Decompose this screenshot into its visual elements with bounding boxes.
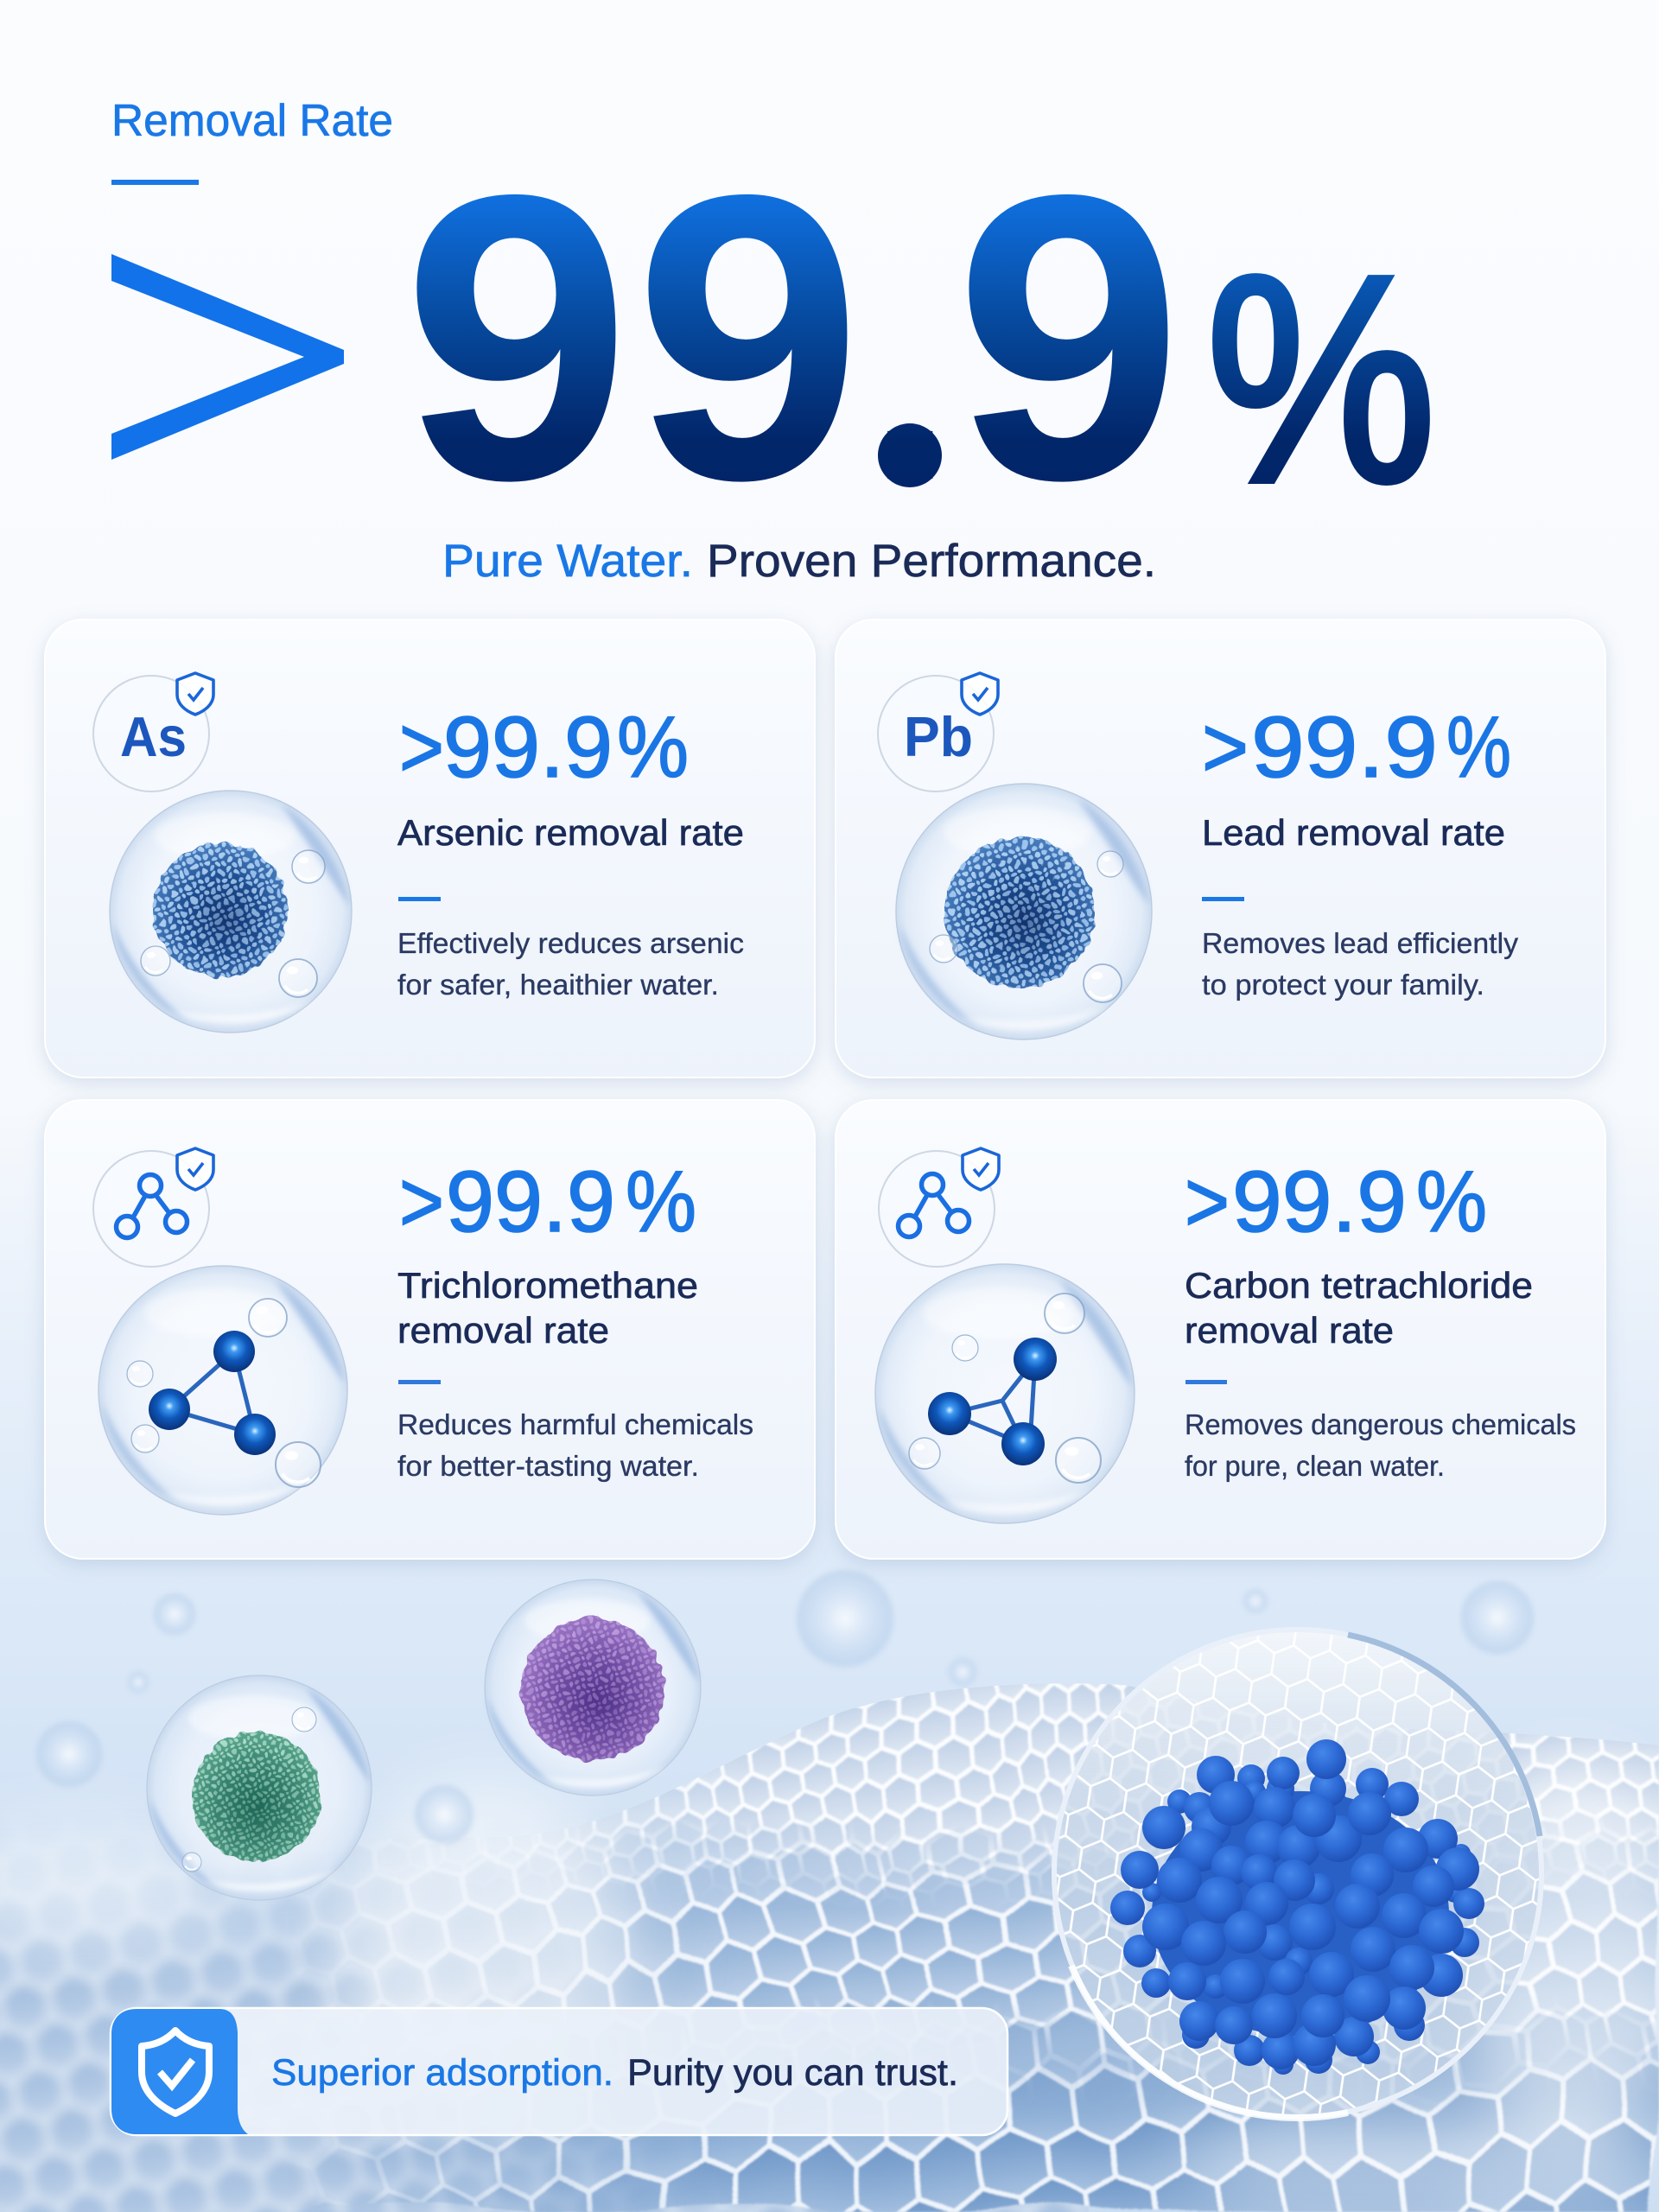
card background <box>836 620 1605 1077</box>
molecule badge <box>93 1148 213 1267</box>
stat label: Arsenic removal rate <box>397 812 744 853</box>
card background <box>836 1100 1605 1559</box>
stat value: % <box>626 1154 696 1250</box>
stat value <box>1185 1154 1487 1250</box>
banner text: Purity you can trust. <box>627 2052 958 2094</box>
stat label: removal rate <box>1185 1310 1394 1351</box>
stat value: % <box>1416 1154 1487 1250</box>
description: Reduces harmful chemicals <box>397 1408 753 1440</box>
green contaminant bubble <box>147 1675 372 1900</box>
hero number: 99.9%: . <box>866 190 955 547</box>
blurred left haze honeycomb <box>0 1859 1075 2212</box>
description: for safer, heaithier water. <box>397 969 719 1001</box>
description <box>397 1408 753 1482</box>
purple contaminant bubble <box>485 1580 701 1796</box>
hero number: 99.9%: % <box>1206 215 1436 543</box>
accent rule <box>398 897 441 901</box>
tagline <box>442 536 1156 587</box>
description: for pure, clean water. <box>1185 1450 1445 1482</box>
hero chevron: greater-than sign <box>111 254 344 460</box>
accent rule <box>1202 897 1244 901</box>
stat value <box>399 1154 696 1250</box>
description <box>1185 1408 1576 1482</box>
callout banner <box>111 2008 1007 2135</box>
hero number: 99.9%: 9 <box>634 111 862 564</box>
hero number: 99.9% <box>403 111 1436 564</box>
panel: arsenic <box>45 620 815 1077</box>
stat value: 99.9 <box>1251 699 1438 796</box>
banner plate <box>111 2008 1007 2135</box>
stat value: % <box>1446 699 1511 796</box>
bubble with lead particle <box>896 784 1152 1039</box>
element badge: As <box>93 673 213 791</box>
element badge: Pb <box>878 673 998 791</box>
blue tab <box>111 2009 248 2134</box>
description: Effectively reduces arsenic <box>397 927 744 959</box>
floating water droplets <box>36 1570 1534 1844</box>
banner text <box>271 2052 958 2094</box>
card background <box>45 620 815 1077</box>
eyebrow: Removal Rate: Removal Rate <box>111 96 393 146</box>
hero number: 99.9%: 9 <box>403 111 631 564</box>
stat value: % <box>617 699 689 796</box>
element badge: Pb: Pb <box>904 705 973 768</box>
molecule badge <box>879 1148 999 1267</box>
card background <box>45 1100 815 1559</box>
stat label: Lead removal rate <box>1202 812 1505 853</box>
panel: trichloromethane <box>45 1100 815 1559</box>
stat value: > <box>399 699 444 796</box>
stat value <box>399 699 689 796</box>
panel: lead <box>836 620 1605 1077</box>
element badge: As: As <box>120 705 187 768</box>
filter surface: honeycomb scene <box>0 1642 1659 2212</box>
bubble with molecule <box>875 1264 1135 1523</box>
panel: carbon tetrachloride <box>836 1100 1605 1559</box>
stat value <box>1202 699 1511 796</box>
stat label: Trichloromethane <box>397 1265 698 1306</box>
stat label <box>1185 1265 1533 1351</box>
stat value: > <box>1185 1154 1230 1250</box>
banner text: Superior adsorption. <box>271 2052 613 2094</box>
tagline: Proven Performance. <box>707 536 1156 587</box>
description <box>1202 927 1519 1001</box>
stat value: > <box>1202 699 1249 796</box>
description: Removes dangerous chemicals <box>1185 1408 1576 1440</box>
description: Removes lead efficiently <box>1202 927 1519 959</box>
stat value: > <box>399 1154 444 1250</box>
stat label <box>397 1265 698 1351</box>
description: to protect your family. <box>1202 969 1484 1001</box>
tagline: Pure Water. <box>442 536 693 587</box>
accent rule <box>398 1380 441 1384</box>
bubble with arsenic particle <box>110 791 352 1033</box>
description: for better-tasting water. <box>397 1450 699 1482</box>
blue bead cluster <box>1110 1739 1484 2075</box>
hero number: 99.9%: 9 <box>955 111 1183 564</box>
stat value: 99.9 <box>446 1154 615 1250</box>
icon: shield check <box>142 2031 209 2113</box>
sphere inner honeycomb <box>1052 1627 1544 2120</box>
accent rule <box>1185 1380 1227 1384</box>
description <box>397 927 744 1001</box>
large adsorbent sphere with blue cluster <box>1052 1627 1544 2120</box>
stat label: Carbon tetrachloride <box>1185 1265 1533 1306</box>
stat label: removal rate <box>397 1310 609 1351</box>
soft light washes on surface <box>0 1763 1659 2212</box>
eyebrow rule <box>111 180 199 185</box>
bubble with molecule <box>99 1266 347 1515</box>
stat value: 99.9 <box>1232 1154 1407 1250</box>
stat value: 99.9 <box>443 699 613 796</box>
honeycomb hill <box>336 1683 1659 2212</box>
